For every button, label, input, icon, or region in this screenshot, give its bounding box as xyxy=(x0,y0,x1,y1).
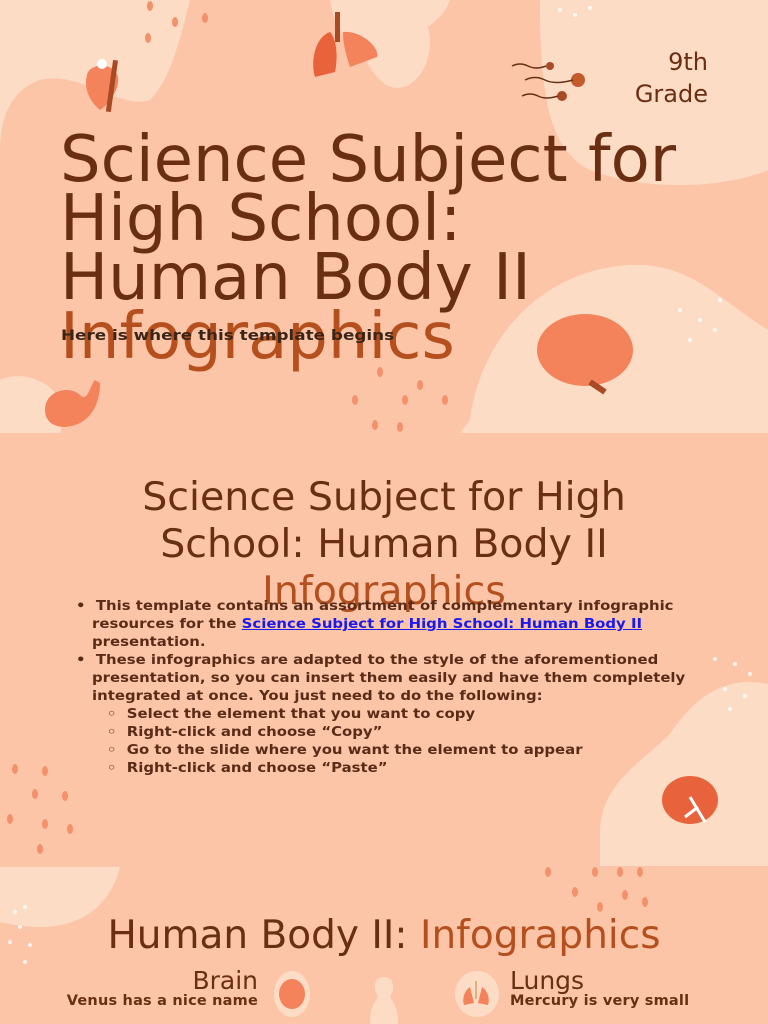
item: brain: Brain xyxy=(192,966,258,995)
text: grade: 9th xyxy=(668,48,708,76)
icon: sperm xyxy=(512,62,585,101)
icon: lungs xyxy=(455,971,499,1017)
icon: brain xyxy=(537,314,633,394)
bullet list: • These infographics are adapted to the style of the aforementioned presentation, so you can insert them easily and have them completely integrated at once. You just need to do the following: xyxy=(76,653,685,704)
bullet list xyxy=(76,599,685,776)
icon: heart xyxy=(86,59,118,112)
heading: Infographics xyxy=(262,568,506,614)
bullet list: • This template contains an assortment of complementary infographic resources for the Science Subject for High School: Human Body II presentation. xyxy=(76,599,674,650)
subtitle: Here is where this template begins xyxy=(61,328,394,344)
icon: liver xyxy=(662,776,718,824)
item: lungs: Lungs xyxy=(510,966,584,995)
title: Infographics xyxy=(60,300,455,374)
icon: lungs xyxy=(313,12,378,77)
slide 2: instructions xyxy=(0,434,768,866)
item: lungs xyxy=(455,966,689,1017)
text: grade: Grade xyxy=(635,80,708,108)
heading xyxy=(142,474,626,614)
icon: brain xyxy=(274,971,310,1017)
slide 1: title xyxy=(0,0,768,433)
slide 3: infographics xyxy=(0,867,768,1024)
bullet list: ◦ Select the element that you want to copy xyxy=(107,707,475,722)
item: lungs: Mercury is very small xyxy=(510,993,689,1009)
heading: Science Subject for High School: Human Body II xyxy=(142,474,626,567)
text: grade xyxy=(635,48,708,108)
bullet list: ◦ Right-click and choose “Paste” xyxy=(107,761,388,776)
title: Science Subject for High School: Human Body II xyxy=(60,123,676,315)
bullet list: ◦ Right-click and choose “Copy” xyxy=(107,725,382,740)
item: brain xyxy=(66,966,310,1017)
item: brain: Venus has a nice name xyxy=(67,993,258,1009)
bullet list: ◦ Go to the slide where you want the element to appear xyxy=(107,743,583,758)
heading: Human Body II: Infographics xyxy=(107,913,661,958)
icon: stomach xyxy=(45,380,100,427)
